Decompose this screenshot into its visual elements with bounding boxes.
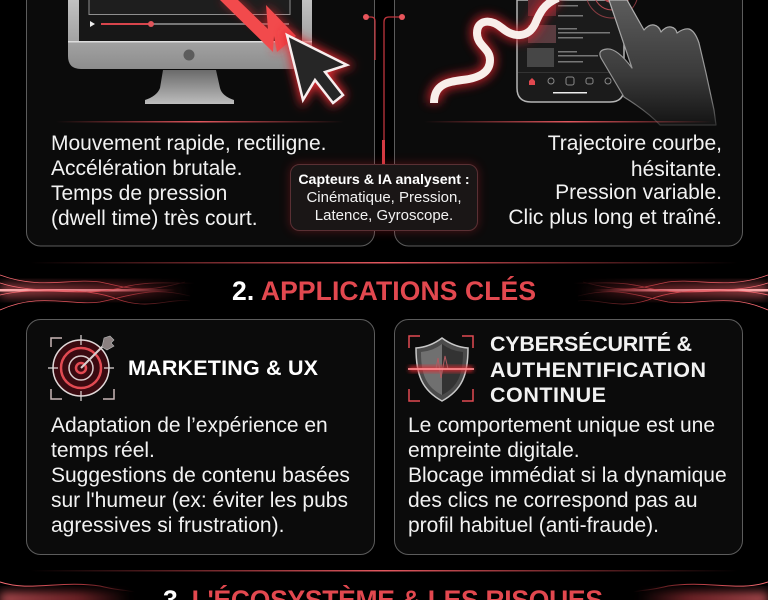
text block: cybersecurity description: Le comportement unique est une — [408, 414, 715, 437]
callout: sensors and AI: Latence, Gyroscope. — [315, 207, 453, 224]
divider — [30, 570, 738, 572]
decorative glow: right streaks — [573, 275, 768, 310]
text block: cybersecurity description: Blocage immédiat si la dynamique — [408, 464, 727, 487]
text block: fast movement traits: Mouvement rapide, rectiligne. — [51, 132, 326, 155]
panel: fast movement on desktop — [26, 0, 374, 246]
text block: fast movement traits: Accélération brutale. — [51, 157, 242, 180]
icon: desktop monitor — [68, 0, 312, 104]
text block: fast movement traits: Temps de pression — [51, 182, 227, 205]
panel: marketing and UX — [26, 320, 374, 554]
text block: hesitant movement traits — [508, 132, 722, 229]
text block: marketing description: sur l'humeur (ex: éviter les pubs — [51, 489, 348, 512]
icon: smartphone — [517, 0, 638, 102]
icon: cursor arrow — [287, 35, 347, 103]
text block: marketing description: Suggestions de contenu basées — [51, 464, 350, 487]
icon: shield with pulse — [408, 336, 474, 401]
heading: marketing: MARKETING & UX — [128, 356, 319, 380]
panel: hesitant movement on phone — [394, 0, 742, 246]
callout: sensors and AI: Cinématique, Pression, — [306, 189, 462, 206]
text block: marketing description: agressives si frustration). — [51, 514, 284, 537]
text block: cybersecurity description: profil habituel (anti-fraude). — [408, 514, 659, 537]
heading: cybersecurity — [490, 331, 706, 407]
text block: marketing description: temps réel. — [51, 439, 155, 462]
text block: cybersecurity description — [408, 414, 727, 537]
text block: fast movement traits — [51, 132, 326, 230]
text block: fast movement traits: (dwell time) très court. — [51, 207, 258, 230]
divider — [30, 262, 738, 264]
callout: sensors and AI — [290, 164, 478, 231]
text block: hesitant movement traits: Trajectoire courbe, — [548, 132, 722, 155]
decorative glow: lower left streaks — [0, 582, 135, 600]
text block: marketing description — [51, 414, 350, 537]
heading: cybersecurity: CONTINUE — [490, 383, 606, 407]
decorative glow: left streaks — [0, 275, 195, 310]
panel: cybersecurity — [394, 320, 742, 554]
callout: sensors and AI: Capteurs & IA analysent : — [298, 172, 470, 188]
text block: cybersecurity description: des clics ne correspond pas au — [408, 489, 698, 512]
text block: hesitant movement traits: hésitante. — [631, 158, 722, 181]
heading: cybersecurity: AUTHENTIFICATION — [490, 358, 706, 382]
connector: sensors line — [363, 14, 405, 164]
decorative glow: lower right streaks — [633, 582, 768, 600]
heading: section 2: 2. APPLICATIONS CLÉS — [232, 276, 536, 306]
divider — [424, 121, 712, 122]
text block: cybersecurity description: empreinte digitale. — [408, 439, 580, 462]
icon: target with arrow — [48, 335, 114, 401]
divider — [56, 121, 344, 122]
icon: lightning movement trail — [220, 0, 296, 52]
icon: wavy movement trail — [434, 0, 558, 103]
text block: marketing description: Adaptation de l’expérience en — [51, 414, 328, 437]
heading: cybersecurity: CYBERSÉCURITÉ & — [490, 331, 692, 356]
icon: pointing hand — [600, 0, 716, 125]
text block: hesitant movement traits: Clic plus long et traîné. — [508, 206, 722, 229]
text block: hesitant movement traits: Pression variable. — [555, 181, 722, 204]
